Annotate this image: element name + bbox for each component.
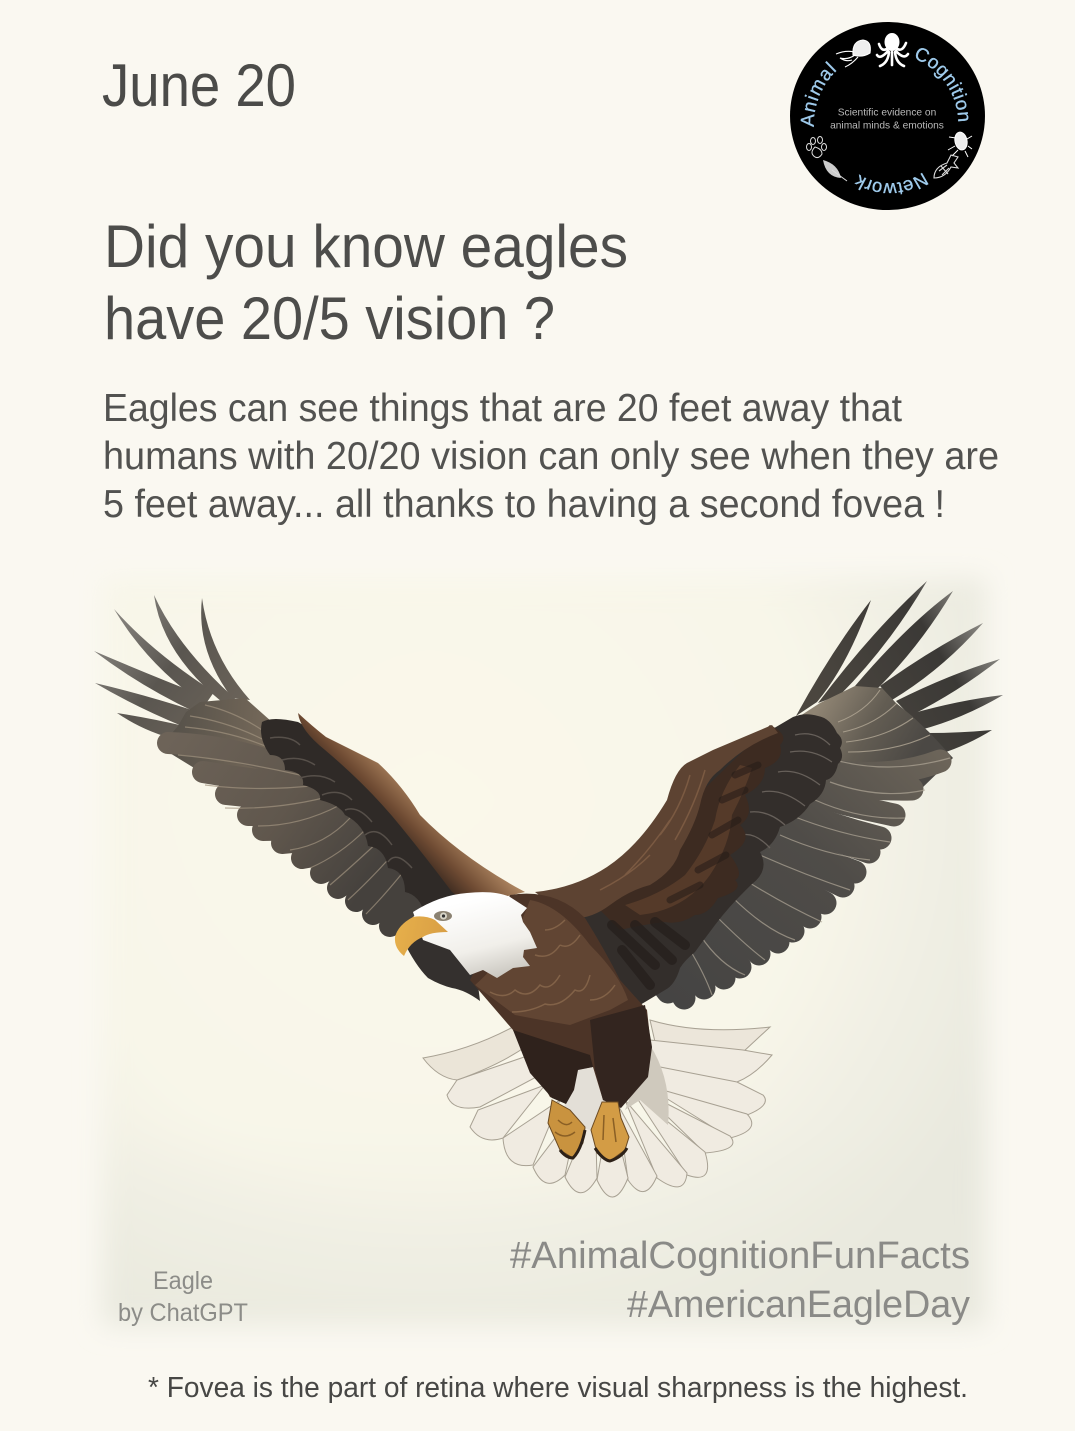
icon: fish (934, 155, 958, 178)
body text: humans with 20/20 vision can only see when they are (103, 435, 999, 478)
left underwing beneath head (403, 932, 480, 1001)
chest feathers (475, 900, 628, 1025)
left wing hand fill (160, 698, 300, 790)
image panel background (102, 578, 986, 1326)
right wing inner covert mass (570, 714, 842, 1005)
hashtags: #AmericanEagleDay (627, 1284, 970, 1326)
left wing finger feathers (94, 595, 250, 740)
body text (103, 387, 999, 526)
icon: paw print (806, 136, 826, 158)
right foot (591, 1102, 629, 1161)
right wing feather edges (690, 758, 950, 995)
body text: 5 feet away... all thanks to having a second fovea ! (103, 483, 945, 526)
illustration: bald eagle (94, 581, 1003, 1197)
logo tagline: Scientific evidence on (838, 108, 936, 118)
date heading: June 20 (102, 52, 296, 119)
left foot (548, 1100, 585, 1158)
main title: have 20/5 vision ? (104, 285, 555, 352)
right wing finger feathers (796, 581, 1003, 754)
beak (395, 916, 448, 956)
logo: Animal Cognition Network (790, 22, 985, 210)
eye (434, 911, 452, 921)
right wing lower dark coverts (612, 922, 685, 985)
logo tagline (830, 108, 944, 132)
main title (104, 213, 628, 352)
right wing brown streaks (600, 770, 705, 890)
left thigh (513, 1030, 593, 1104)
body text: Eagles can see things that are 20 feet away that (103, 387, 902, 430)
icon: jellyfish (836, 40, 870, 67)
right wing covert scallops (742, 734, 832, 848)
footnote: * Fovea is the part of retina where visual sharpness is the highest. (148, 1372, 968, 1404)
icon: feather (823, 160, 847, 181)
right wing dark feather scallops (670, 765, 758, 900)
image credit (118, 1267, 248, 1327)
image credit: by ChatGPT (118, 1299, 248, 1327)
right wing lighter brown band (625, 765, 752, 915)
main title: Did you know eagles (104, 213, 628, 280)
left wing (94, 595, 525, 926)
left wing covert scallops (270, 737, 412, 868)
left wing feather edges (178, 705, 408, 914)
tail feathers (423, 1020, 772, 1197)
left wing under-shoulder coverts (261, 719, 480, 915)
logo text: Cognition: Cognition (916, 48, 968, 122)
left wing shoulder (298, 713, 525, 905)
hashtags: #AnimalCognitionFunFacts (510, 1235, 970, 1277)
chest feather scallops (490, 920, 615, 1012)
body (470, 894, 652, 1108)
right wing hand feather edges (838, 690, 930, 752)
right wing shoulder (535, 725, 778, 918)
right wing hand fill (800, 686, 953, 800)
right thigh (590, 1005, 652, 1108)
right wing brown covert band (590, 725, 783, 930)
icon: beetle (948, 131, 972, 157)
logo tagline: animal minds & emotions (830, 120, 944, 132)
icon: octopus (877, 33, 908, 66)
head (395, 892, 537, 978)
logo text: Animal: Animal (800, 61, 836, 128)
left wing flight feathers (168, 743, 430, 926)
logo text: Network: Network (854, 172, 928, 194)
right wing flight feathers (640, 761, 940, 998)
image credit: Eagle (153, 1267, 213, 1295)
right wing (535, 581, 1003, 1005)
hashtags (510, 1235, 970, 1326)
